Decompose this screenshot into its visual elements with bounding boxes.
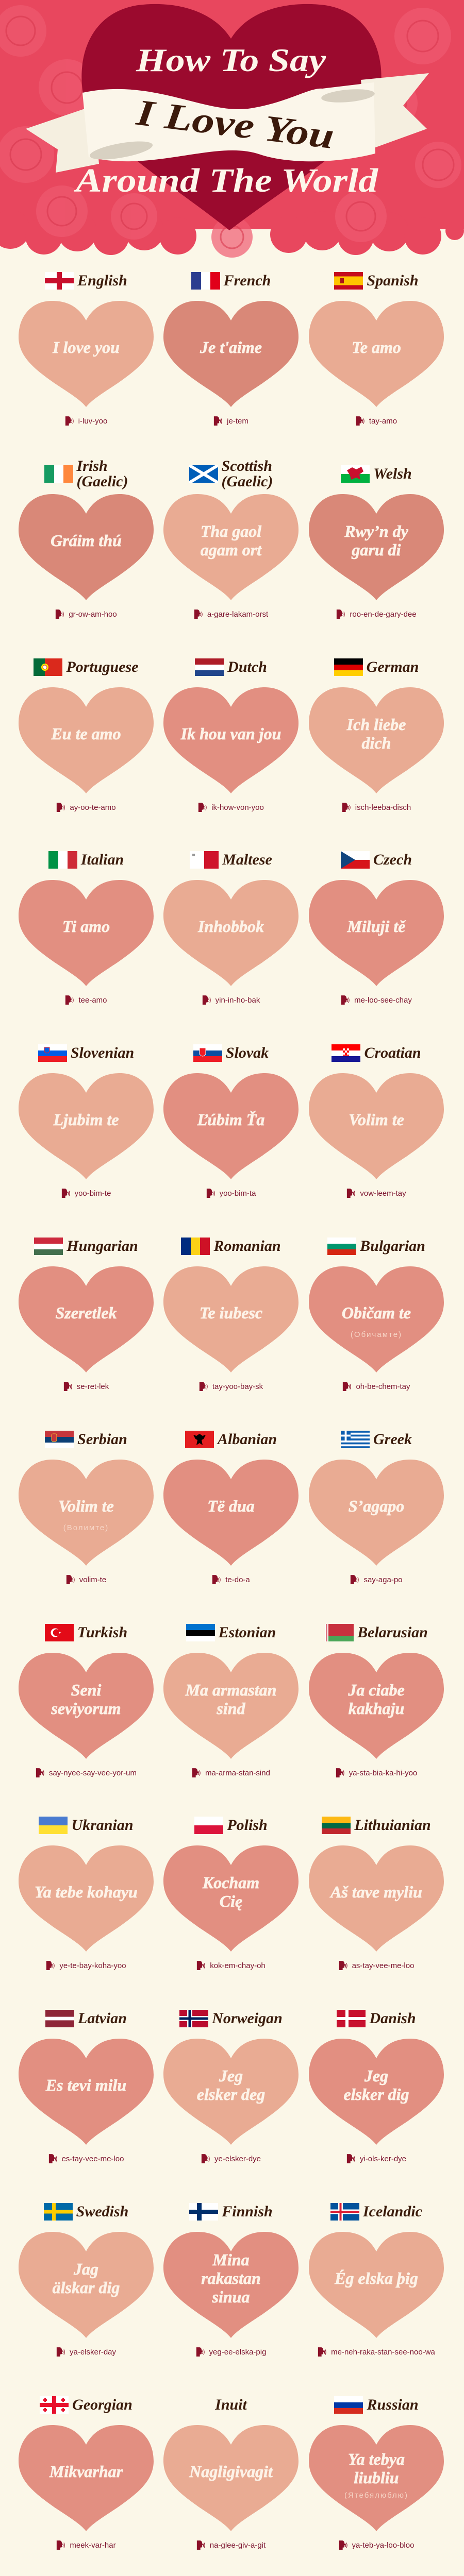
cell: Albanian: Të dua <box>207 1497 255 1515</box>
cell: Croatian: vow-leem-tay <box>360 1189 406 1197</box>
cell: Latvian: Es tevi milu <box>46 2076 126 2094</box>
cell: Croatian <box>309 1044 444 1198</box>
cell: Estonian: Ma armastan <box>186 1681 276 1699</box>
cell: Polish: Cię <box>220 1892 242 1910</box>
title: I Love You: I Love You <box>134 92 336 157</box>
cell: Bulgarian <box>309 1238 444 1391</box>
cell: Slovak: yoo-bim-ta <box>220 1189 256 1197</box>
cell: Romanian: Romanian <box>213 1238 281 1255</box>
cell: Maltese: Inhobbok <box>198 917 264 936</box>
title heart <box>81 4 382 230</box>
cell: Hungarian: Szeretlek <box>55 1303 117 1322</box>
cell: Swedish: älskar dig <box>53 2278 120 2297</box>
cell: Estonian: Estonian <box>219 1624 276 1641</box>
cell: Irish: gr-ow-am-hoo <box>69 610 117 618</box>
cell: German: isch-leeba-disch <box>355 803 411 812</box>
cell: Estonian: ma-arma-stan-sind <box>205 1768 270 1777</box>
cell: Spanish: tay-amo <box>369 416 397 426</box>
cell: Russian: ya-teb-ya-loo-bloo <box>352 2541 414 2549</box>
cell: Irish <box>19 457 154 619</box>
cell: Lithuanian: Lithuianian <box>354 1817 431 1834</box>
cell: Latvian: es-tay-vee-me-loo <box>62 2155 124 2163</box>
cell: Slovenian: Slovenian <box>71 1044 134 1061</box>
cell: Turkish: Turkish <box>77 1624 127 1641</box>
cell: Portuguese <box>19 658 154 812</box>
cell: Estonian: sind <box>217 1699 245 1718</box>
cell: Maltese: Maltese <box>222 851 272 868</box>
cell: Danish: yi-ols-ker-dye <box>360 2155 406 2163</box>
cell: Finnish: yeg-ee-elska-pig <box>209 2347 266 2357</box>
cell: Slovak <box>163 1044 299 1198</box>
cell: German: German <box>367 658 419 675</box>
cell: Belarusian: Belarusian <box>357 1624 428 1641</box>
cell: Portuguese: ay-oo-te-amo <box>70 803 116 812</box>
cell: Slovak: Slovak <box>226 1044 269 1061</box>
cell: Georgian: Georgian <box>72 2396 132 2413</box>
cell: Belarusian: kakhaju <box>349 1699 404 1718</box>
cell: Finnish: Mina <box>212 2250 250 2269</box>
cell: Georgian: Mikvarhar <box>49 2462 123 2481</box>
cell: Albanian: Albanian <box>218 1431 277 1448</box>
cell: Russian: liubliu <box>354 2468 399 2487</box>
cell: Croatian: Croatian <box>364 1044 421 1061</box>
cell: Scottish: (Gaelic) <box>222 473 273 490</box>
cell: Polish <box>163 1817 299 1970</box>
cell: Danish: elsker dig <box>343 2085 409 2104</box>
cell: Belarusian <box>309 1624 444 1777</box>
cell: Scottish: a-gare-lakam-orst <box>207 610 268 618</box>
cell: Norweigan: ye-elsker-dye <box>214 2155 261 2163</box>
cell: Bulgarian: oh-be-chem-tay <box>356 1382 410 1391</box>
cell: Scottish <box>163 457 299 619</box>
cell: Irish: (Gaelic) <box>77 473 128 490</box>
cell: Latvian: Latvian <box>78 2010 127 2027</box>
cell: Lithuanian <box>309 1817 444 1970</box>
cell: Russian: Ya tebya <box>348 2450 405 2468</box>
cell: French <box>163 272 299 426</box>
cell: Italian: tee-amo <box>78 995 107 1005</box>
cell: Greek <box>309 1431 444 1584</box>
cell: Russian: Russian <box>367 2396 419 2413</box>
cell: Danish: Danish <box>369 2010 416 2027</box>
cell: Greek: Greek <box>373 1431 412 1448</box>
cell: Greek: S’agapo <box>349 1497 404 1515</box>
cell: Finnish: sinua <box>212 2287 250 2306</box>
cell: Slovenian: Ljubim te <box>53 1110 119 1129</box>
cell: Estonian <box>163 1624 299 1777</box>
cell: Czech: Miluji tě <box>347 917 405 936</box>
cell: Swedish: Swedish <box>76 2203 128 2220</box>
cell: Norweigan: elsker deg <box>197 2085 265 2104</box>
cell: French: French <box>224 272 271 289</box>
cell: Romanian: tay-yoo-bay-sk <box>212 1382 263 1391</box>
cell: Slovenian <box>19 1044 154 1198</box>
cell: Latvian <box>19 2010 154 2163</box>
cell: Finnish <box>163 2203 299 2357</box>
cell: Serbian: (Волимте) <box>63 1523 109 1532</box>
cell: Belarusian: ya-sta-bia-ka-hi-yoo <box>349 1768 417 1777</box>
cell: French: Je t'aime <box>200 338 262 357</box>
cell: Inuit <box>163 2396 299 2550</box>
cell: Greek: say-aga-po <box>363 1575 403 1584</box>
cell: Bulgarian: Bulgarian <box>360 1238 425 1255</box>
cell: Scottish: Tha gaol <box>201 522 261 540</box>
cell: Welsh: Rwy’n dy <box>344 522 408 540</box>
cell: Scottish: agam ort <box>201 540 261 559</box>
cell: English: i-luv-yoo <box>78 416 107 426</box>
cell: Hungarian: se-ret-lek <box>77 1382 109 1391</box>
cell: Inuit: Inuit <box>215 2396 247 2413</box>
cell: Slovak: Ľúbim Ťa <box>197 1110 264 1129</box>
title: Around The World: Around The World <box>73 162 378 199</box>
cell: Swedish: ya-elsker-day <box>70 2347 116 2357</box>
cell: Inuit: Nagligivagit <box>189 2462 273 2481</box>
cell: Georgian <box>19 2396 154 2550</box>
cell: Polish: Kocham <box>203 1873 259 1892</box>
cell: Dutch <box>163 658 299 812</box>
cell: Finnish: rakastan <box>201 2269 261 2287</box>
cell: Italian: Ti amo <box>62 917 110 936</box>
cell: Bulgarian: (Обичамте) <box>351 1330 402 1339</box>
cell: Irish: Irish <box>77 457 108 474</box>
cell: Romanian <box>163 1238 299 1391</box>
cell: Turkish: say-nyee-say-vee-yor-um <box>49 1768 137 1777</box>
ribbon banner <box>26 73 429 173</box>
cell: Spanish <box>309 272 444 426</box>
cell: Turkish: seviyorum <box>51 1699 121 1718</box>
cell: Inuit: na-glee-giv-a-git <box>210 2541 266 2549</box>
header: roses background with title heart <box>0 0 464 258</box>
cell: Czech: me-loo-see-chay <box>354 995 412 1005</box>
cell: German: dich <box>362 734 391 752</box>
cell: Dutch: Dutch <box>227 658 267 675</box>
cell: Welsh <box>309 465 444 619</box>
cell: Albanian <box>163 1431 299 1584</box>
cell: Polish: Polish <box>227 1817 268 1834</box>
cell: Icelandic: Ég elska þig <box>335 2269 418 2287</box>
cell: Finnish: Finnish <box>222 2203 273 2220</box>
cell: Russian: (Ятебялюблю) <box>344 2491 408 2500</box>
cell: Danish <box>309 2010 444 2163</box>
cell: German: Ich liebe <box>347 715 406 734</box>
cell: Spanish: Te amo <box>352 338 401 357</box>
cell: Georgian: meek-var-har <box>70 2541 116 2549</box>
cell: Scottish: Scottish <box>222 457 272 474</box>
cell: Turkish <box>19 1624 154 1777</box>
cell: Slovenian: yoo-bim-te <box>75 1189 111 1197</box>
cell: Serbian: Serbian <box>77 1431 127 1448</box>
cell: Serbian: volim-te <box>79 1575 106 1584</box>
cell: Ukranian: Ya tebe kohayu <box>35 1883 138 1901</box>
cell: English: I love you <box>53 338 120 357</box>
cell: Croatian: Volim te <box>349 1110 404 1129</box>
cell: Lithuanian: Aš tave myliu <box>330 1883 422 1901</box>
cell: Norweigan <box>163 2010 299 2163</box>
cell: Serbian: Volim te <box>58 1497 114 1515</box>
cell: Maltese <box>163 851 299 1005</box>
cell: Russian <box>309 2396 444 2550</box>
cell: Hungarian <box>19 1238 154 1391</box>
cell: Turkish: Seni <box>71 1681 101 1699</box>
cell: Welsh: roo-en-de-gary-dee <box>350 610 417 618</box>
cell: Belarusian: Ja ciabe <box>348 1681 405 1699</box>
cell: Portuguese: Portuguese <box>66 658 138 675</box>
cell: Icelandic <box>309 2203 444 2357</box>
cell: Icelandic: me-neh-raka-stan-see-noo-wa <box>331 2347 435 2357</box>
cell: Albanian: te-do-a <box>225 1575 250 1584</box>
cell: Lithuanian: as-tay-vee-me-loo <box>352 1961 414 1970</box>
cell: Irish: Gráim thú <box>51 531 122 550</box>
cell: Swedish: Jag <box>74 2260 98 2278</box>
cell: Romanian: Te iubesc <box>200 1303 262 1322</box>
cell: Dutch: ik-how-von-yoo <box>211 803 264 812</box>
cell: Portuguese: Eu te amo <box>51 724 121 743</box>
cell: Welsh: Welsh <box>373 465 412 482</box>
cell: Czech <box>309 851 444 1005</box>
cell: Norweigan: Jeg <box>219 2066 243 2085</box>
title: How To Say: How To Say <box>136 42 326 78</box>
cell: Dutch: Ik hou van jou <box>181 724 281 743</box>
cell: Hungarian: Hungarian <box>67 1238 138 1255</box>
cell: Swedish <box>19 2203 154 2357</box>
cell: Ukranian <box>19 1817 154 1970</box>
cell: Italian: Italian <box>81 851 124 868</box>
cell: English: English <box>77 272 127 289</box>
cell: Ukranian: Ukranian <box>71 1817 134 1834</box>
cell: Welsh: garu di <box>352 540 401 559</box>
cell: Maltese: yin-in-ho-bak <box>216 995 260 1005</box>
cell: Czech: Czech <box>373 851 412 868</box>
cell: Ukranian: ye-te-bay-koha-yoo <box>59 1961 126 1970</box>
cell: Italian <box>19 851 154 1005</box>
cell: German <box>309 658 444 812</box>
cell: Polish: kok-em-chay-oh <box>210 1961 266 1970</box>
cell: English <box>19 272 154 426</box>
cell: Spanish: Spanish <box>367 272 419 289</box>
cell: Norweigan: Norweigan <box>212 2010 283 2027</box>
cell: French: je-tem <box>227 416 248 426</box>
cell: Danish: Jeg <box>364 2066 388 2085</box>
cell: Bulgarian: Običam te <box>342 1303 411 1322</box>
cell: Icelandic: Icelandic <box>363 2203 422 2220</box>
cell: Serbian <box>19 1431 154 1584</box>
